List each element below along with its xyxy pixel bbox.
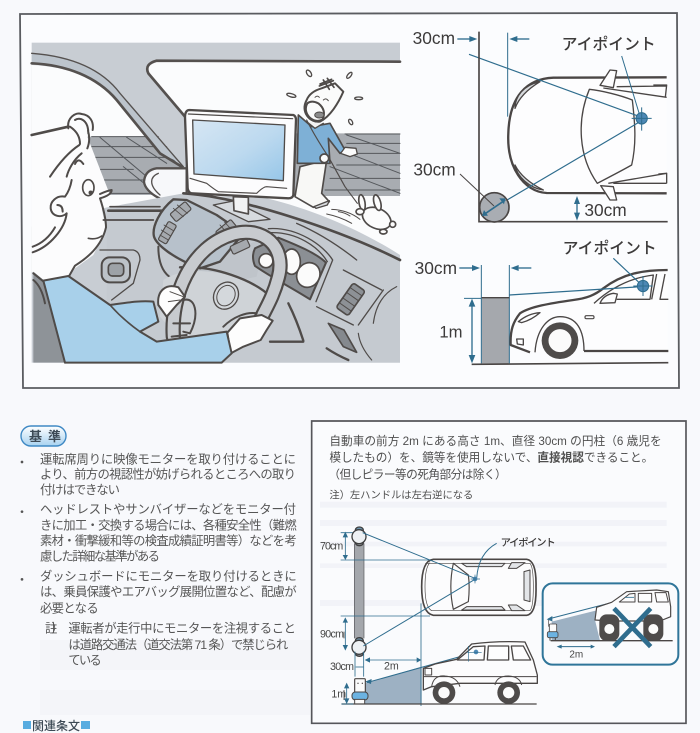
side view SUV [365, 667, 422, 704]
text block: criteria: は道路交通法（道交法第 71 条）で禁じられ [68, 637, 288, 652]
text block: criteria: 運転者が走行中にモニターを注視すること [68, 621, 296, 636]
driver [32, 114, 112, 281]
labels: 30cm [413, 28, 455, 48]
steering wheel [173, 232, 280, 337]
diagram: pole, car and child: 1m [331, 688, 346, 700]
inset: wrong example raised SUV: 2m [569, 649, 583, 660]
dimension arrows [341, 532, 421, 704]
labels: 30cm [584, 200, 627, 220]
labels: 1m [439, 322, 462, 341]
text block: criteria: 付けはできない [40, 483, 120, 497]
rabbit [356, 194, 396, 234]
requirement text: （但しピラー等の死角部分は除く） [328, 467, 507, 481]
panel: direct visibility requirement [312, 421, 686, 723]
text block: criteria: 運転席周りに映像モニターを取り付けることに [40, 452, 296, 466]
door vent switch [100, 250, 140, 300]
top view car [508, 70, 667, 200]
text block: criteria: は、乗員保護やエアバッグ展開位置など、配慮が [40, 584, 297, 599]
text block: criteria: 必要となる [40, 601, 99, 615]
text block: criteria: ヘッドレストやサンバイザーなどをモニター付 [40, 502, 296, 516]
labels: アイポイント [562, 35, 656, 53]
bleed-through [320, 502, 667, 606]
child figure [355, 679, 365, 693]
requirement text: 自動車の前方 2m にある高さ 1m、直径 30cm の円柱（6 歳児を [329, 434, 662, 448]
man outside [286, 69, 396, 234]
steering hub [160, 271, 273, 340]
A pillar [32, 53, 182, 163]
windshield [147, 61, 400, 255]
diagram: pole, car and child [320, 527, 537, 706]
text block: criteria: ダッシュボードにモニターを取り付けるときに [40, 568, 297, 583]
panel: illustration frame [20, 13, 679, 388]
text block: criteria: 素材・衝撃緩和等の検査成績証明書等）などを考 [40, 533, 297, 548]
text block: criteria: きに加工・交換する場合には、各種安全性（難燃 [40, 517, 297, 532]
heading badge: 基準: 準 [48, 429, 61, 444]
illustration: driver view blocked by monitor [32, 43, 400, 363]
dashboard [107, 193, 400, 363]
pillar circle [480, 193, 509, 222]
text block: criteria [21, 452, 297, 667]
requirement text [328, 434, 662, 502]
diagram: pole, car and child: 30cm [330, 661, 354, 673]
heading badge: 基準 [21, 426, 66, 446]
centre stack [154, 199, 243, 268]
heading badge: 基準: 基 [29, 429, 42, 444]
text block: criteria: より、前方の視認性が妨げられるところへの取り [40, 467, 296, 482]
driver hands [158, 286, 185, 317]
panel: direct visibility requirement: アイポイント [501, 537, 556, 549]
dimension arrows [457, 36, 580, 221]
labels: 30cm [413, 160, 456, 180]
seat and body [33, 272, 65, 363]
labels: 30cm [415, 258, 457, 278]
footer heading: 関連条文 [23, 718, 90, 733]
footer heading: 関連条文: 関連条文 [32, 718, 80, 733]
requirement text: 模したもの）を、鏡等を使用しないで、直接視認できること。 [329, 450, 653, 464]
diagram: top view eye point [413, 28, 668, 364]
side car [511, 270, 668, 352]
labels: アイポイント [563, 239, 657, 257]
monitor [185, 110, 296, 222]
requirement text: 注）左ハンドルは左右逆になる [329, 489, 473, 502]
diagram: pole, car and child: 70cm [320, 540, 343, 552]
diagram: pole, car and child: 2m [384, 660, 399, 672]
inset: wrong example raised SUV [543, 583, 678, 665]
gauge cluster [253, 238, 326, 299]
text block: criteria: 慮した詳細な基準がある [40, 549, 160, 564]
right vent [336, 283, 365, 316]
text block: criteria: ている [68, 653, 102, 667]
text block: criteria: 註） [45, 621, 64, 636]
side window [32, 65, 180, 227]
top view SUV [422, 559, 536, 615]
road through windshield [293, 133, 400, 196]
labels [413, 28, 657, 341]
diagram: pole, car and child: 90cm [320, 628, 344, 640]
eye point marker [632, 107, 652, 131]
side view [482, 298, 509, 363]
wing mirror [144, 168, 187, 205]
